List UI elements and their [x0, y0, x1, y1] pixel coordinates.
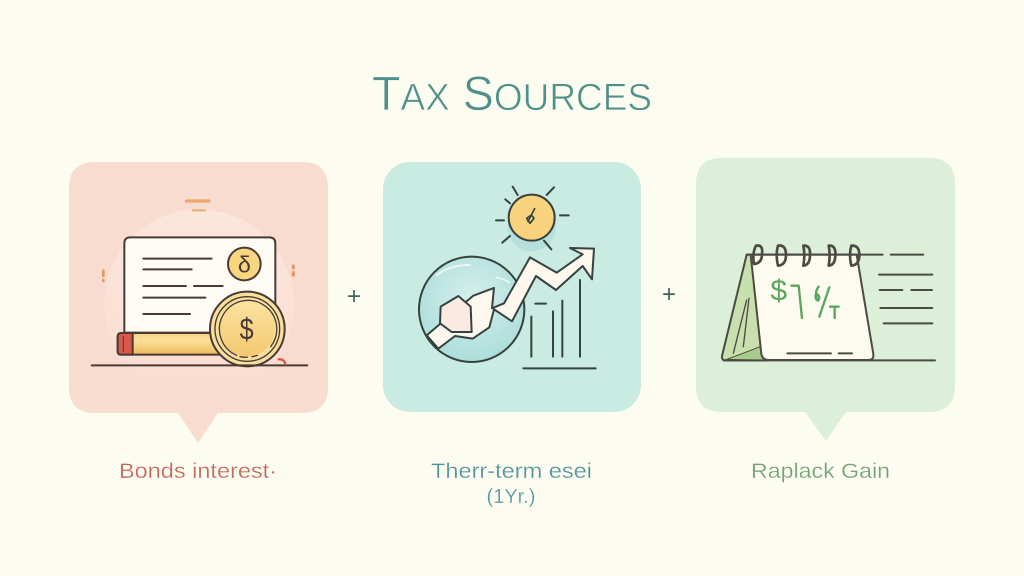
label: bonds interest: Bonds interest·	[119, 460, 277, 483]
panel background	[383, 162, 641, 412]
label: short-term asset	[431, 460, 592, 508]
panel: capital gain	[696, 158, 955, 441]
panel: bonds interest	[69, 162, 328, 443]
icon: sun coin, hand and rising arrow	[419, 187, 596, 368]
plus sign two: +	[662, 281, 676, 308]
label line one: Therr-term esei	[431, 460, 592, 483]
panel background with pointer	[696, 158, 955, 441]
icon: bond certificate and coin: $	[240, 312, 254, 346]
plus sign one: +	[347, 283, 361, 310]
icon: bond certificate and coin	[92, 201, 307, 399]
icon: bond certificate and coin: δ	[238, 252, 251, 278]
icon: desk calendar	[722, 246, 935, 360]
panel background with pointer	[69, 162, 328, 443]
icon: desk calendar: $	[770, 275, 787, 308]
panel: short-term asset	[383, 162, 641, 412]
title: TAX SOURCES	[372, 68, 652, 121]
label: capital gain: Raplack Gain	[751, 460, 890, 483]
label line two: (1Yr.)	[487, 486, 535, 508]
